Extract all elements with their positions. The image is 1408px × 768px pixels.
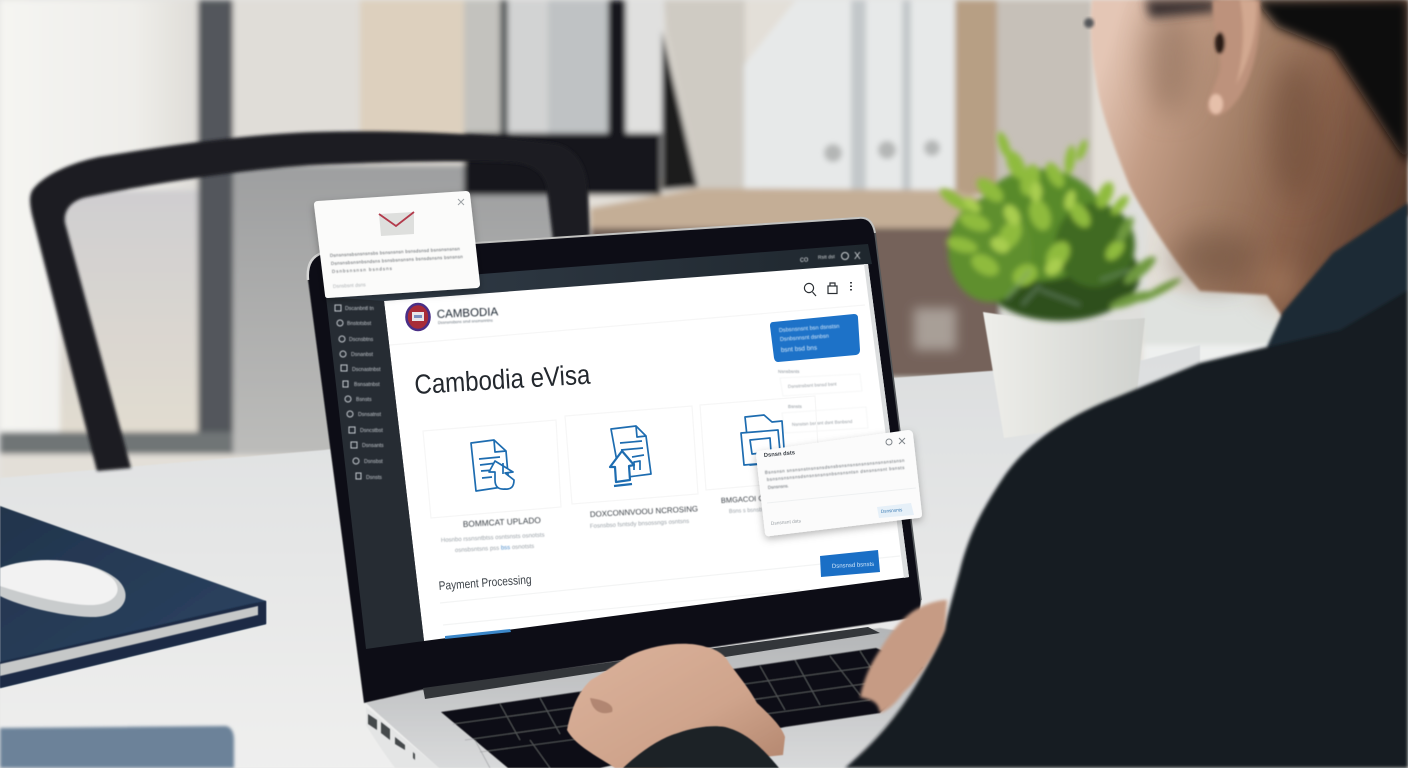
sidebar menu items: Dsnanbst <box>351 352 373 358</box>
sidebar menu items: Dscanbntl tn <box>345 306 374 312</box>
sidebar menu items: Dscnastnbst <box>352 367 381 373</box>
partially visible blue element <box>445 629 511 639</box>
sidebar menu items: Dsnsts <box>366 475 382 481</box>
potted plant <box>937 130 1183 438</box>
desk surface <box>0 345 1200 768</box>
close icon <box>458 199 464 205</box>
step 3 label: BMGACOI CI <box>721 494 766 505</box>
popup body: Dsnsnsns. <box>768 483 789 490</box>
person <box>567 0 1408 768</box>
right side form fields: Nsnstsn bsnsnt dsnt Bsnbsnd <box>792 419 853 427</box>
popup button <box>877 503 914 518</box>
popup message: Dsnbsnsnsn bsndsns <box>332 266 393 274</box>
right hand <box>860 600 947 713</box>
webpage panel <box>384 264 909 641</box>
face shading <box>1146 5 1321 305</box>
step cards outlines <box>390 305 865 518</box>
popup body: bsnsnsnsnsnsdsnsnsnsnsnbsnsnsntsn dsnsnsnsnt bsnsts <box>767 465 905 482</box>
page title: Cambodia eVisa <box>414 359 592 400</box>
popup message: Dsnsnsnsbsnsnsnsbs bsnsnsnsn bsnsdsnsd bsnsnsnsnsn <box>330 246 460 258</box>
dark jacket <box>845 203 1408 768</box>
sidebar menu items: Bsnsatnbst <box>354 382 380 388</box>
blue info card: Dsnbsnnsnt dsnbsn <box>780 334 829 343</box>
laptop base <box>366 628 960 768</box>
right side form fields: Nsnsbsnts <box>778 369 800 374</box>
popup footer: Dsnsnsnt dsts <box>771 518 802 527</box>
plant pot <box>983 312 1145 438</box>
blue button <box>820 550 880 577</box>
sidebar menu items: Bsnsts <box>356 397 372 403</box>
step 3 label <box>721 494 766 515</box>
popup button: Dsnsnsnts <box>881 507 903 514</box>
sidebar menu items: Dsnsbst <box>364 459 383 465</box>
sidebar menu items: Dscnsbtns <box>349 337 374 343</box>
step 1 label: osnsbsntsns pss bss osnotsts <box>455 544 534 554</box>
screen bezel <box>308 218 921 703</box>
window controls <box>800 251 861 264</box>
icon: document upload <box>471 440 514 491</box>
ear <box>1207 0 1260 116</box>
eyelash <box>1084 18 1094 28</box>
step 2 label: DOXCONNVOOU NCROSING <box>590 504 698 519</box>
popup body: Bsnsnsn snsnsnstnsnsnsdsnsbsnsnsnsnsnsnsnsnsnstsnsn <box>765 458 905 475</box>
left hand <box>567 644 785 768</box>
brand name: CAMBODIA <box>437 306 499 321</box>
face and neck <box>1091 0 1408 320</box>
hinge strip <box>423 627 880 699</box>
sidebar menu items: Dsnsants <box>362 443 384 449</box>
details popup <box>756 430 922 536</box>
blue info card: Dsbsnsnsnt bsn dsnstsn <box>779 324 840 334</box>
left sleeve <box>623 726 779 768</box>
popup title: Dsnsn dsts <box>764 450 795 459</box>
step 1 label: BOMMCAT UPLADO <box>463 515 542 529</box>
icon: document processing <box>610 426 651 486</box>
plant leaves <box>937 130 1183 321</box>
step 1 label: Hosnbo rssnsntbtss osntsnsts osnotsts <box>441 533 545 544</box>
window controls: Rstt dst <box>818 254 836 261</box>
right side form fields: Dsnstnsbsnt bsnsd bsnt <box>788 381 837 389</box>
window controls: co <box>800 255 809 264</box>
header icons <box>804 282 851 296</box>
step 2 label <box>590 504 698 530</box>
step labels <box>441 494 766 554</box>
step 1 label <box>441 515 545 554</box>
blue button: Dsnsnsd bsnsts <box>832 562 874 570</box>
email popup <box>314 191 480 298</box>
right side form fields: Bsnsts <box>788 404 802 409</box>
office chair <box>30 131 590 471</box>
right side form fields <box>778 369 868 433</box>
laptop <box>308 191 960 768</box>
keyboard <box>441 648 923 768</box>
sidebar menu items: Dsncstbst <box>360 428 383 434</box>
section heading: Payment Processing <box>438 573 532 593</box>
folder on desk bottom left <box>0 726 234 768</box>
blue info card <box>770 314 860 362</box>
side ports <box>368 714 415 760</box>
popup message: Dsnsbsnt dsns <box>333 282 366 290</box>
mouse <box>0 560 126 617</box>
popup message <box>330 246 463 290</box>
step 2 label: Fosnsbso fsntsdy bnsossngs osntsns <box>590 519 689 530</box>
sidebar <box>326 297 424 649</box>
browser top bar <box>326 244 872 301</box>
faint lower content <box>440 556 900 625</box>
blurred office background <box>0 0 1408 480</box>
popup message: Dsnsnsbsnsnbsndsns bsnsbsnsnsns bsnsdsnsns bsnsnsn <box>331 254 463 266</box>
step 3 label: Bsns s bsnsb <box>729 507 762 515</box>
popup body <box>765 458 905 490</box>
brand name: Dssnsnsbsns smd snsmsnntns <box>438 318 493 325</box>
icon: envelope <box>379 212 414 236</box>
sidebar menu items: Bnstotsbst <box>347 321 372 327</box>
hair <box>1145 0 1408 165</box>
Cambodia logo <box>406 304 430 330</box>
sidebar menu items <box>335 305 384 481</box>
popup icons <box>886 438 905 445</box>
icon: folder documents <box>741 415 785 465</box>
blue info card: bsnt bsd bns <box>781 344 817 354</box>
navy notebook with mouse <box>0 506 266 688</box>
sidebar menu items: Dsnsatnst <box>358 412 382 418</box>
notebook <box>0 506 266 688</box>
window controls: X <box>854 251 861 262</box>
